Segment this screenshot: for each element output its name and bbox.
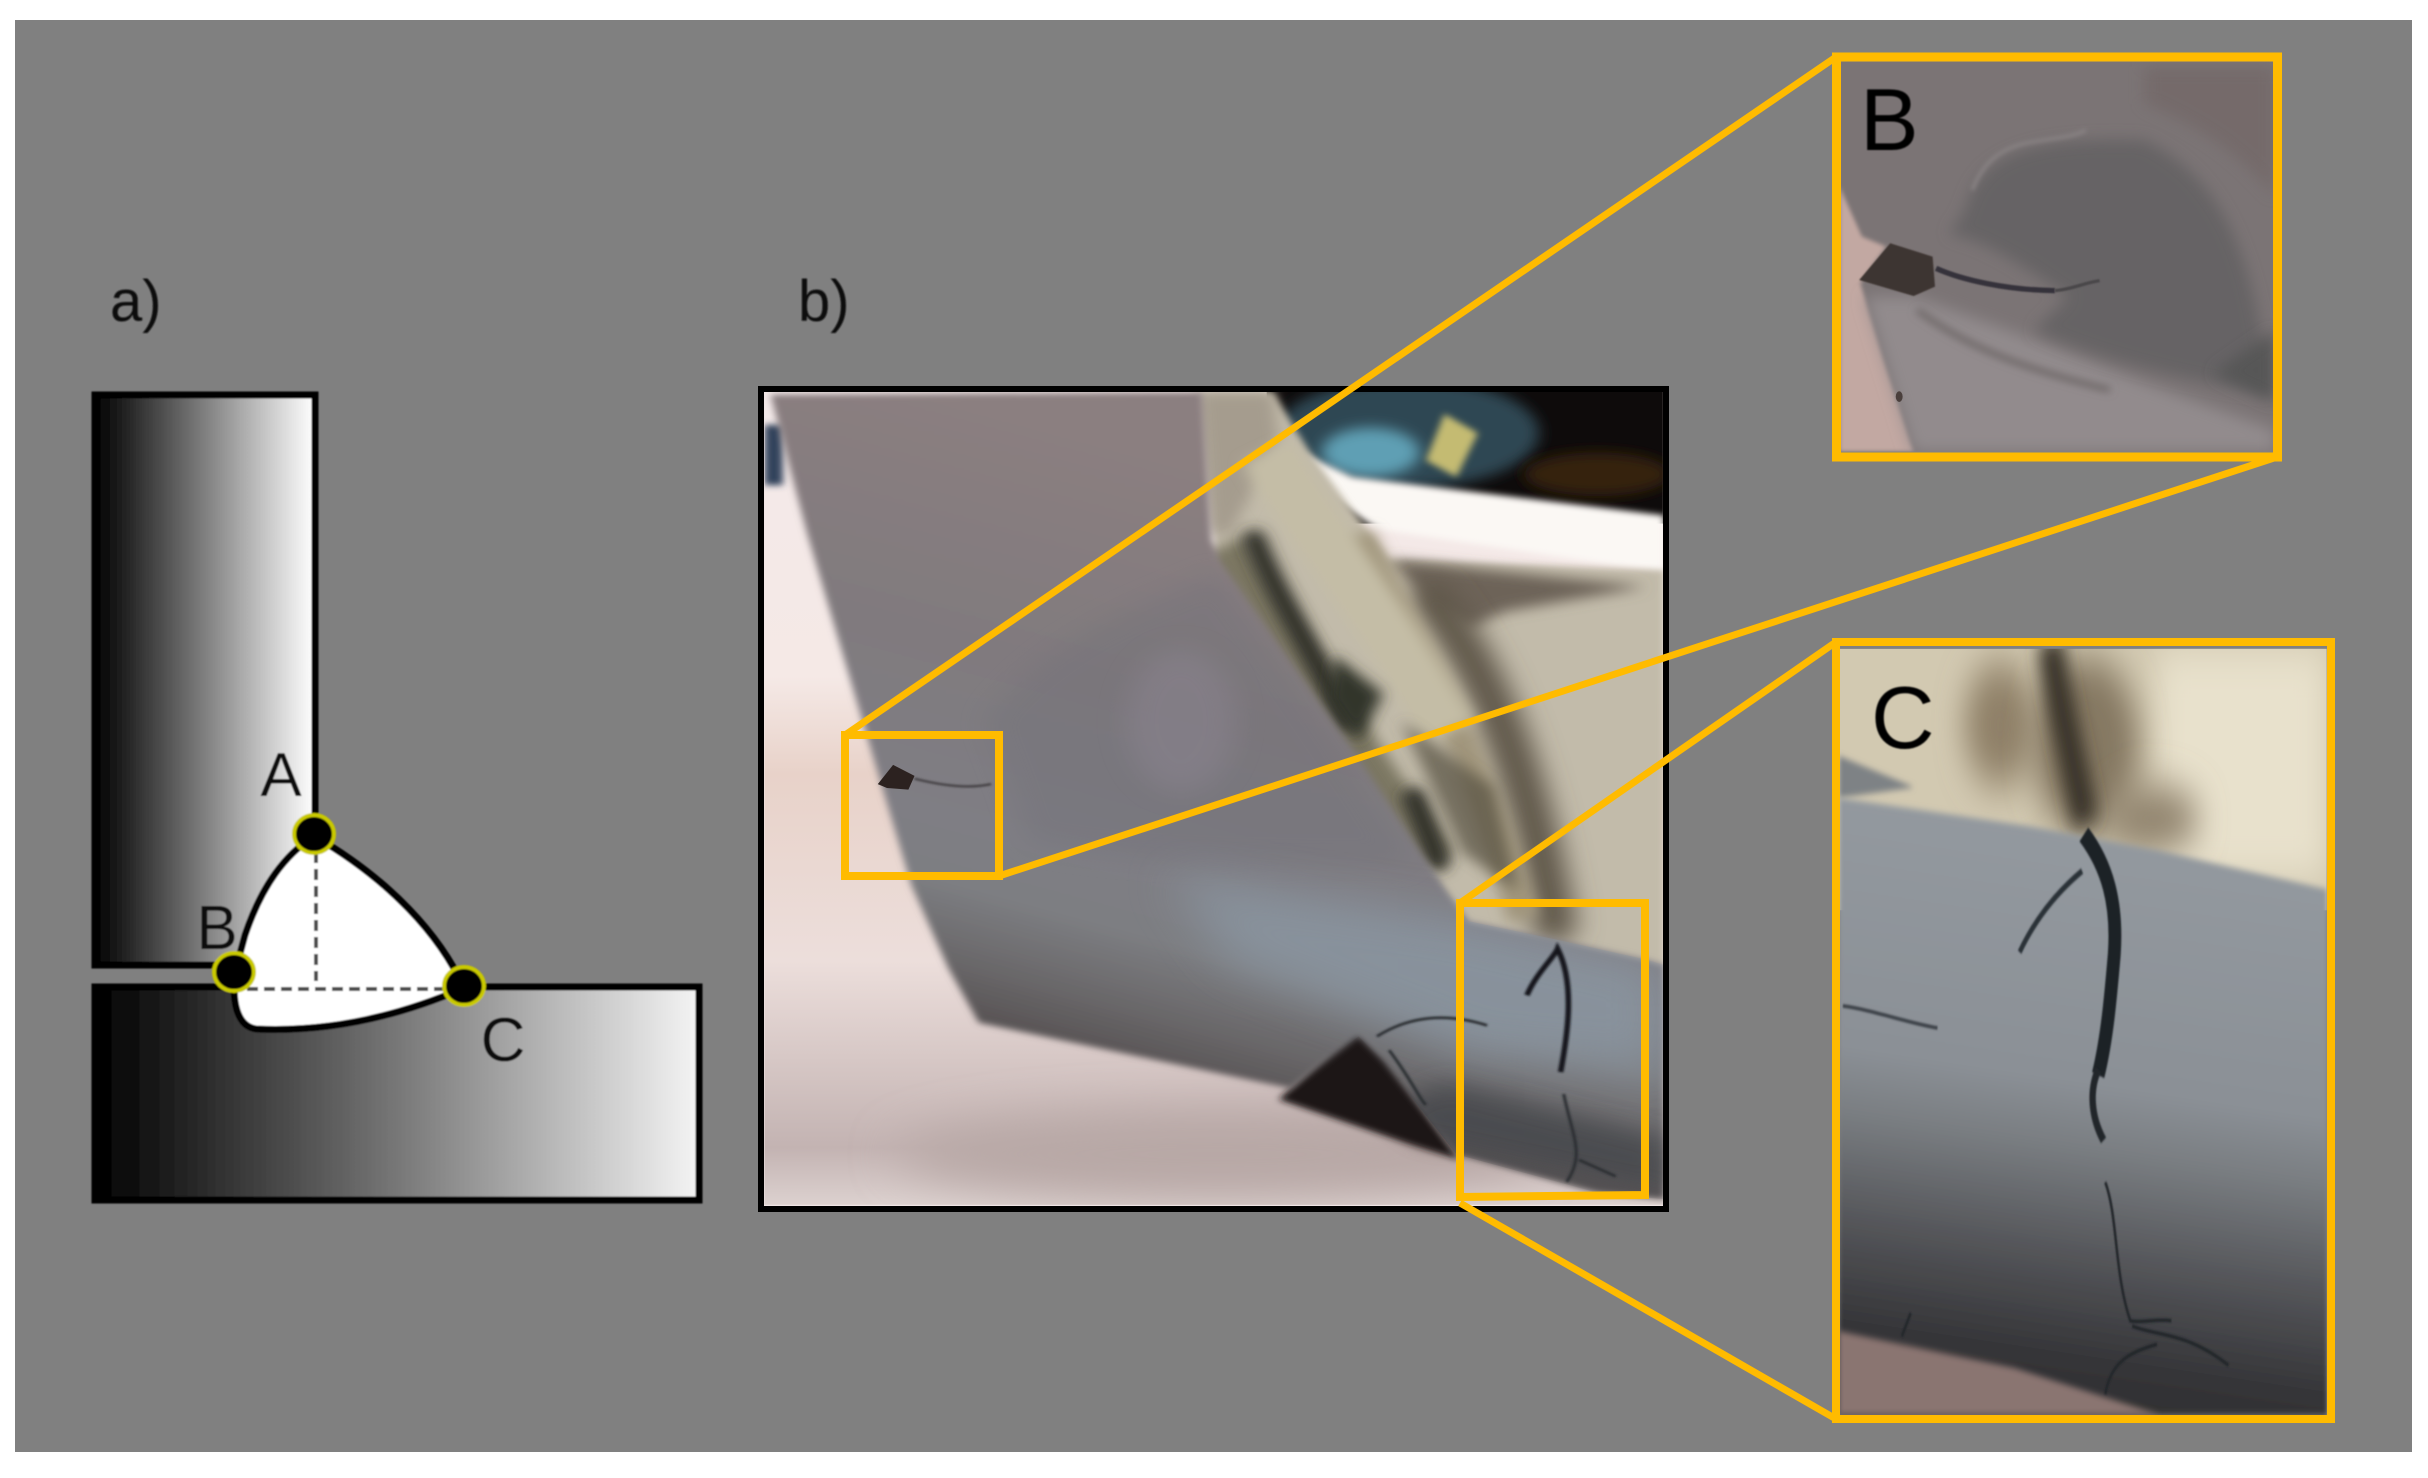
zoom inset C <box>1839 641 2327 1415</box>
inset B photo <box>1840 62 2275 452</box>
inset C photo <box>1839 641 2327 1415</box>
label A: A <box>260 741 302 810</box>
large box C <box>1836 642 2331 1419</box>
connector lines C <box>1460 642 1836 1419</box>
label B: B <box>196 894 238 963</box>
label b): b) <box>798 269 850 334</box>
panel b: photograph of cracked weld <box>761 378 1671 1209</box>
label C: C <box>481 1006 525 1075</box>
zoom inset B <box>1840 62 2275 452</box>
point C marker <box>444 967 484 1005</box>
large box B <box>1836 57 2278 457</box>
photo painting <box>764 378 1671 1205</box>
photo frame <box>761 389 1666 1209</box>
weld bead <box>234 836 464 1029</box>
point B marker <box>214 953 254 991</box>
vertical plate <box>95 395 315 965</box>
connector lines B <box>845 57 2277 876</box>
panel a: weld diagram <box>95 269 699 1200</box>
point A marker <box>294 815 334 853</box>
small box C <box>1460 903 1645 1197</box>
horizontal plate <box>95 987 699 1200</box>
inset C letter: C <box>1871 668 1935 767</box>
label a): a) <box>110 269 162 334</box>
dashed weld legs <box>247 852 446 989</box>
small box B <box>845 735 999 876</box>
yellow zoom callouts <box>845 57 2331 1419</box>
inset B letter: B <box>1860 70 1919 169</box>
